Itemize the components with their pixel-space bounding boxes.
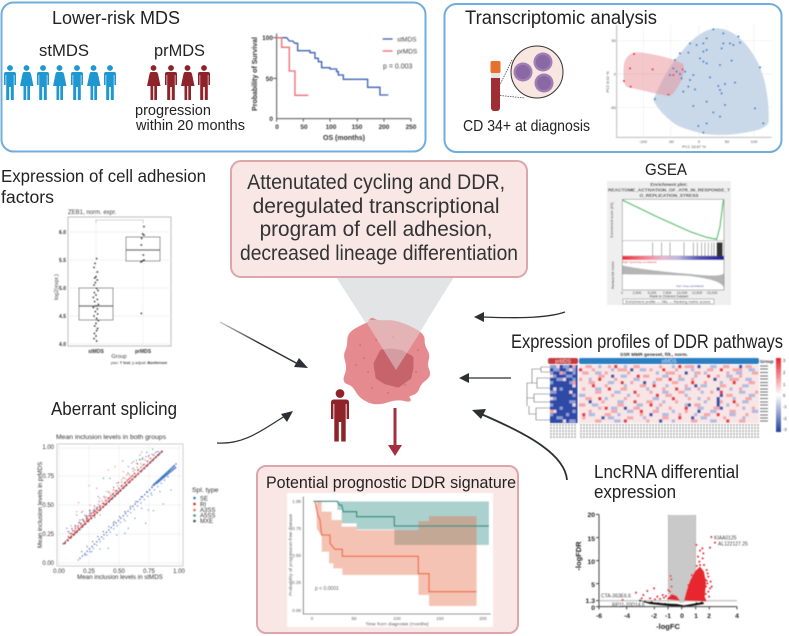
heading: cell adhesion factors: Expression of cell adhesion [1,166,206,186]
chart: overall survival [252,33,418,142]
chart: inclusion level scatter plot: 0.25 [83,569,95,575]
chart: overall survival: 0 [275,124,279,131]
heading: transcriptomic analysis: Transcriptomic analysis [465,8,657,29]
chart: overall survival: 100 [326,124,337,131]
chart: enrichment plot: 'low' (neg correlated) [676,284,704,288]
panel: aberrant splicing [37,398,219,581]
panel: lower-risk MDS [2,2,426,152]
panel: central finding [231,161,527,277]
chart: overall survival: p = 0.003 [383,64,412,70]
chart: PCA plot: 50 [725,139,730,144]
chart: volcano plot: -1 [665,613,671,620]
chart: overall survival: 50 [266,76,273,83]
legend: splicing type: RI [200,502,206,508]
chart: progression-free survival [287,493,493,628]
chart: progression-free survival: Time from diagnosis (months) [365,622,429,628]
chart: volcano plot: 4 [735,613,739,620]
chart: ZEB1 box plot [54,210,171,365]
chart: volcano plot: -2 [651,613,657,620]
chart: progression-free survival: 50 [351,616,357,621]
text: central finding: Attenutated cycling and DDR, [247,171,505,194]
chart: volcano plot: 0 [591,605,595,612]
chart: ZEB1 box plot: log2(expr.) [54,274,60,300]
chart: heatmap: Group [760,359,774,364]
chart: progression-free survival: 0.75 [292,526,301,531]
chart: inclusion level scatter plot: 0.75 [143,569,155,575]
panel: potential prognostic DDR signature [257,466,518,633]
chart: overall survival: 50 [300,124,308,131]
legend: expression color scale: 0 [783,393,786,398]
chart: overall survival: 200 [379,124,390,131]
chart: volcano plot: RP11-20D14.6 [612,602,645,608]
chart: enrichment plot: Enrichment plot: [650,182,688,187]
chart: enrichment plot: 0 [621,291,623,295]
chart: enrichment plot: Rank in Ordered Dataset [650,294,688,298]
chart: progression-free survival: 0.25 [292,580,301,585]
heading: GSEA: GSEA [645,160,688,179]
chart: volcano plot: -logFC [656,622,680,631]
chart: enrichment plot: 7,500 [663,291,671,295]
chart: heatmap: stMDS [662,359,677,365]
chart: overall survival: 250 [406,124,417,131]
chart: enrichment plot [607,181,731,305]
legend: splicing type: Spl. type [192,487,219,494]
chart: inclusion level scatter plot: 1.00 [42,445,55,451]
chart: ZEB1 box plot: 6.0 [59,230,66,236]
chart: progression-free survival: p < 0.0001 [315,586,339,592]
text: central finding: program of cell adhesion, [260,218,493,241]
chart: inclusion level scatter plot: 0.75 [42,474,55,480]
chart: ZEB1 box plot: ZEB1, norm. expr. [68,210,117,216]
icon: prMDS patients [147,65,210,100]
heading: prognostic DDR signature: Potential prognostic DDR signature [266,473,516,492]
chart: enrichment plot: Enrichment profile — Hits — Ranking metric scores [626,300,711,304]
chart: progression-free survival: 150 [436,616,444,621]
chart: PCA plot: -50 [668,139,675,144]
chart: ZEB1 box plot: Group [111,354,127,360]
icon: stMDS patients [4,65,116,100]
text: central finding: deregulated transcriptional [253,195,500,218]
chart: enrichment plot: 15,000 [707,291,717,295]
chart: volcano plot: 1.3 [586,598,595,605]
chart: inclusion level scatter plot [37,434,219,581]
chart: progression-free survival: 1.00 [292,499,301,504]
chart: enrichment plot: 12,500 [692,291,702,295]
chart: PCA plot: PC2 8.02 % [605,71,610,93]
chart: volcano plot: 10 [587,559,595,566]
heading: aberrant splicing: Aberrant splicing [51,398,177,419]
chart: volcano plot: -4 [624,613,630,620]
chart: enrichment plot: O_REPLICATION_STRESS [639,193,699,198]
chart: inclusion level scatter plot: 1.00 [173,569,185,575]
chart: enrichment plot: 10,000 [677,291,687,295]
chart: PCA plot: 50 [612,38,617,43]
chart: heatmap: prMDS [555,359,571,365]
chart: PCA plot: 0 [614,72,617,76]
panel: LncRNA differential expression [574,462,748,631]
chart: overall survival: Probability of Survival [252,37,259,111]
legend: expression color scale: -1 [783,404,787,409]
chart: progression-free survival: 0.50 [292,553,301,558]
heading: cell adhesion factors: factors [1,187,54,207]
arrow: lncRNA to cell [472,409,567,480]
chart: progression-free survival: Probability of progression-free disease [288,514,294,596]
heading: LncRNA differential expression: expression [594,482,676,502]
icon: blood tube with CD34+ cells [490,46,563,111]
legend: expression color scale: 1 [783,382,786,387]
text: progression within 20 months: within 20 months [135,117,245,134]
legend: expression color scale: -3 [783,427,787,432]
legend: splicing type: A5SS [200,514,215,520]
chart: volcano plot: CTA-363E6.6 [601,594,631,600]
chart: volcano plot: 1 [694,613,698,620]
chart: overall survival: 150 [352,124,363,131]
chart: volcano plot: -6 [596,613,602,620]
chart: inclusion level scatter plot: Mean inclusion levels in both groups [56,434,167,441]
chart: PCA plot: -50 [610,105,617,110]
chart: inclusion level scatter plot: 0.00 [42,561,55,567]
label: prMDS: prMDS [154,41,205,60]
legend: expression color scale [776,358,787,432]
chart: overall survival: OS (months) [323,135,365,142]
chart: volcano plot: 20 [587,512,595,519]
chart: overall survival: stMDS [397,36,417,44]
label: CD 34+ at diagnosis: CD 34+ at diagnosis [463,118,590,135]
chart: volcano plot: 5 [591,582,595,589]
chart: enrichment plot: REACTOME_ACTIVATION_OF_ATR_IN_RESPONSE_T [608,188,730,192]
chart: progression-free survival: 200 [479,616,487,621]
legend: expression color scale: -2 [783,416,787,421]
chart: volcano plot: 15 [587,536,595,543]
chart: inclusion level scatter plot: 0.00 [53,569,65,575]
chart: enrichment plot: Ranked list metric [611,261,615,289]
label: stMDS: stMDS [39,41,89,60]
legend: splicing type: MXE [200,519,213,525]
chart: heatmap [527,352,787,438]
arrow: splicing to cell [217,411,293,443]
chart: volcano plot: KIAA0125 [714,536,737,542]
graphic: zoom cone [336,277,454,370]
chart: progression-free survival: 0 [311,616,314,621]
chart: overall survival: 0 [269,116,273,123]
arrow: DDR profiles to cell [459,373,511,383]
chart: heatmap: SSR MMR geneset, filt., norm. [620,352,688,358]
arrow: cell adhesion to cell [220,322,308,368]
chart: enrichment plot: 'high' (pos/neg correlated) [622,260,656,264]
text: central finding: decreased lineage differentiation [240,242,518,265]
chart: volcano plot: -logFDR [574,541,583,571]
chart: inclusion level scatter plot: 0.50 [42,503,55,509]
chart: volcano plot: AL122127.25 [718,542,748,548]
legend: expression color scale: 3 [783,358,786,363]
chart: volcano plot: 0 [680,613,684,620]
heading: lower-risk MDS: Lower-risk MDS [52,8,180,28]
chart: progression-free survival: 0.00 [292,608,301,613]
chart: inclusion level scatter plot: Mean inclusion levels in prMDS [37,462,44,548]
chart: PCA plot: -100 [639,139,648,144]
panel: transcriptomic analysis [444,4,782,152]
chart: inclusion level scatter plot: 0.50 [113,569,125,575]
icon: patient [331,389,349,442]
chart: overall survival: prMDS [397,48,418,56]
chart: ZEB1 box plot: prMDS [135,349,152,355]
chart: progression-free survival: 100 [393,616,401,621]
chart: ZEB1 box plot: 4.0 [59,342,66,348]
heading: LncRNA differential expression: LncRNA differential [594,462,739,482]
arrow: prognostic signature [388,408,402,456]
chart: PCA plot: 0 [698,139,701,144]
panel: expression profiles of DDR pathways [511,332,787,438]
chart: overall survival: 100 [262,35,273,42]
legend: splicing type: A3SS [200,508,215,514]
chart: PCA plot: PC1 18.87 % [682,144,706,149]
chart: ZEB1 box plot: 5.0 [59,286,66,292]
chart: enrichment plot: 5,000 [648,291,656,295]
panel: GSEA [607,160,731,305]
chart: ZEB1 box plot: 5.5 [59,258,66,264]
chart: enrichment plot: Enrichment score (ES) [610,202,614,238]
chart: volcano plot: 2 [707,613,711,620]
chart: ZEB1 box plot: stMDS [88,349,104,355]
arrow: GSEA to cell [474,312,565,322]
chart: ZEB1 box plot: 4.5 [59,314,66,320]
legend: expression color scale: 2 [783,370,786,375]
icon: MDS cell [345,319,429,403]
chart: volcano plot [574,512,748,631]
panel: expression of cell adhesion factors [1,166,206,365]
text: progression within 20 months: progression [135,102,211,119]
chart: ZEB1 box plot: pwc: T test; p.adjust: Bonferroni [111,361,167,365]
chart: PCA plot: 100 [751,139,758,144]
chart: PCA plot [605,25,772,149]
legend: splicing type [192,487,219,525]
chart: inclusion level scatter plot: Mean inclusion levels in stMDS [77,574,163,581]
legend: splicing type: SE [200,496,208,502]
chart: enrichment plot: 2,500 [633,291,641,295]
chart: inclusion level scatter plot: 0.25 [42,532,55,538]
